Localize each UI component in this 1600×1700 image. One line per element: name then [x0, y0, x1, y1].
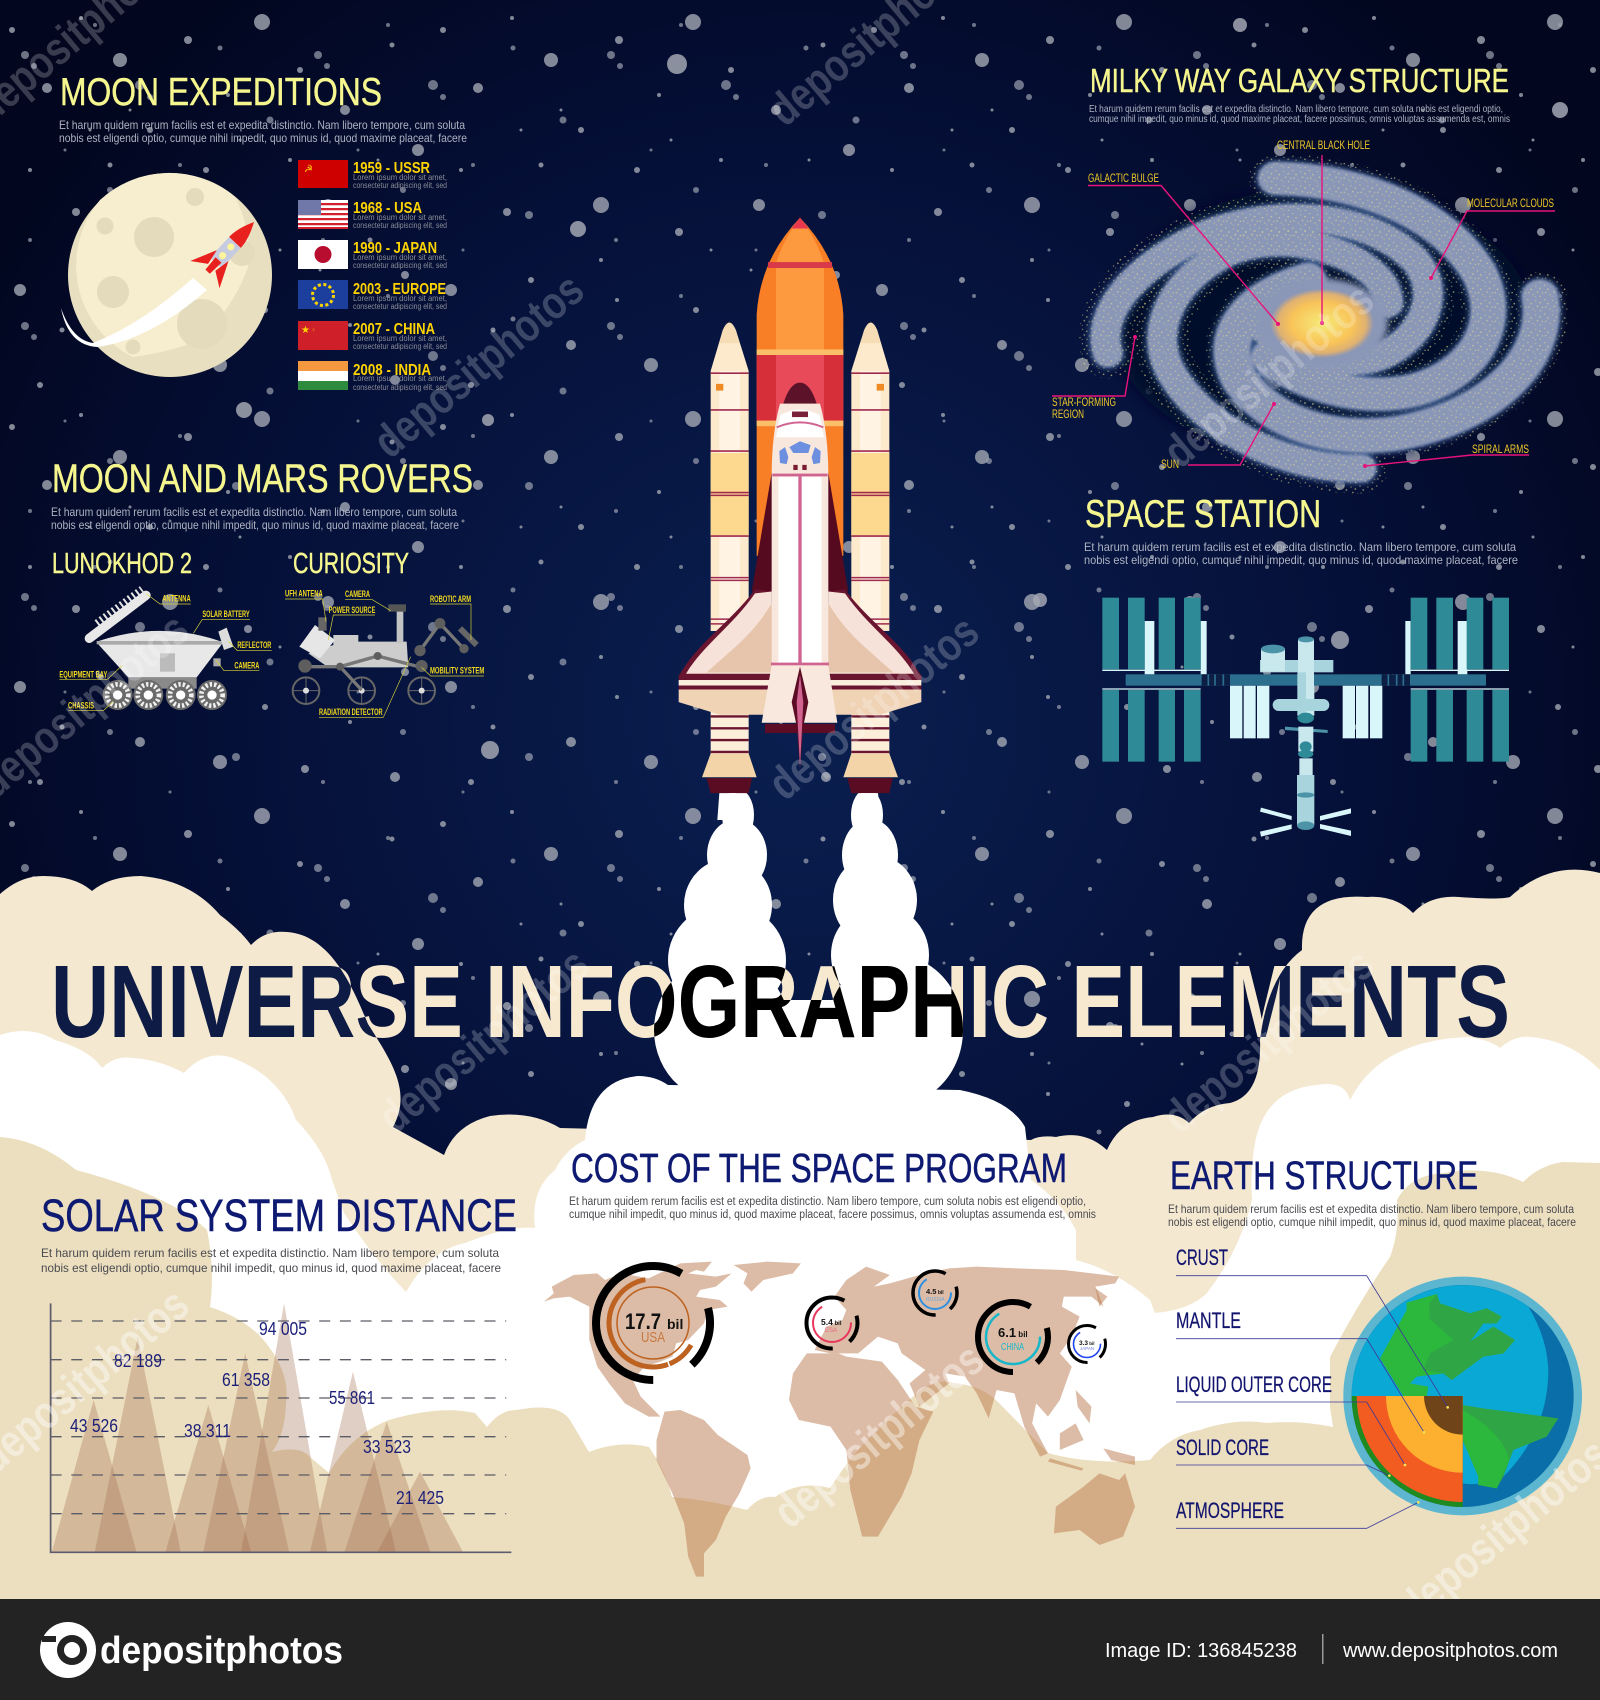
booster nozzles: [702, 710, 898, 820]
subheading: curiosity: CURIOSITY: [293, 548, 409, 580]
flag row: 1959 USSR: ☭: [304, 164, 313, 175]
clouds: cream back layer: [0, 870, 1600, 1313]
labels: earth layers: [1176, 1245, 1332, 1523]
flag row: 1959 USSR: consectetur adipiscing elit, sed: [353, 181, 447, 190]
labels: galaxy parts: GALACTIC BULGE: [1088, 171, 1159, 185]
flag row: 2008 India: 2008 - INDIA: [353, 362, 431, 379]
solid rocket booster: left: [711, 323, 749, 631]
diagram: curiosity rover: MOBILITY SYSTEM: [430, 665, 484, 675]
flag row: 2008 India: [298, 361, 447, 392]
background: starry night sky: [0, 0, 1600, 1250]
labels: galaxy parts: MOLECULAR CLOUDS: [1467, 196, 1554, 210]
marker: usa 17.7 bil: 17.7: [625, 1309, 661, 1334]
flag row: 1990 Japan: Lorem ipsum dolor sit amet,: [353, 253, 447, 262]
panel: space station: [1084, 493, 1518, 837]
chart: distance triangles: [51, 1303, 511, 1552]
flag row: 2007 China: [298, 321, 447, 351]
labels: galaxy parts: SUN: [1161, 457, 1179, 471]
marker: russia 4.5 bil: 4.5 bil: [926, 1287, 944, 1296]
flag row: 1968 USA: [298, 200, 447, 230]
flag row: 1968 USA: Lorem ipsum dolor sit amet,: [353, 213, 447, 222]
labels: galaxy parts: REGION: [1052, 407, 1084, 421]
text block: solar system intro: nobis est eligendi optio, cumque nihil impedit, quo minus id, quod maxime placeat, facere: [41, 1261, 501, 1275]
watermarks: depositphotos: [763, 1333, 993, 1538]
labels: galaxy parts: STAR-FORMING: [1052, 395, 1116, 409]
panel: moon and mars rovers: [51, 457, 484, 717]
text block: cost intro: Et harum quidem rerum facilis est et expedita distinctio. Nam libero tempore, cum soluta nobis est eligendi optio,: [569, 1196, 1086, 1208]
text block: station intro: [1084, 540, 1518, 567]
flag row: 1990 Japan: 1990 - JAPAN: [353, 240, 437, 257]
orbiter wings: [679, 473, 921, 715]
labels: galaxy parts: CENTRAL BLACK HOLE: [1277, 138, 1370, 152]
chart labels: distances: 21 425: [396, 1488, 444, 1508]
chart: spiral galaxy: [1106, 178, 1541, 468]
diagram: curiosity rover: ROBOTIC ARM: [430, 594, 471, 604]
flag row: 1990 Japan: consectetur adipiscing elit, sed: [353, 261, 447, 270]
clouds: darker cream front layer: [0, 1137, 1600, 1600]
clouds: white smoke layer and rocket exhaust: [0, 793, 1600, 1510]
heading: cost of the space program: COST OF THE SPACE PROGRAM: [571, 1145, 1067, 1191]
marker: esa 5.4 bil: ESA: [825, 1328, 837, 1334]
footer url: www.depositphotos.com: [1342, 1640, 1558, 1662]
text block: rovers intro: Et harum quidem rerum facilis est et expedita distinctio. Nam libero tempore, cum soluta: [51, 505, 457, 519]
chart labels: distances: 38 311: [184, 1421, 231, 1441]
marker: esa 5.4 bil: 5.4 bil: [821, 1317, 842, 1327]
flag row: 2003 Europe: consectetur adipiscing elit, sed: [353, 302, 447, 311]
labels: earth layers: LIQUID OUTER CORE: [1176, 1372, 1332, 1397]
diagram: earth cross-section: [1176, 1276, 1582, 1528]
panel: cost of the space program: [544, 1145, 1135, 1577]
diagram: lunokhod 2 rover: CHASSIS: [68, 700, 94, 710]
diagram: lunokhod 2 rover: EQUIPMENT BAY: [59, 670, 107, 680]
flag row: 1959 USSR: [298, 160, 447, 190]
flag row: 1990 Japan: [298, 240, 447, 270]
marker: usa 17.7 bil: bil: [667, 1316, 683, 1332]
chart labels: distances: 61 358: [222, 1370, 270, 1390]
text block: moon expeditions intro: nobis est eligendi optio, cumque nihil impedit, quo minus id, quod maxime placeat, facere: [59, 131, 467, 145]
flag row: 2003 Europe: [298, 280, 447, 311]
watermarks: depositphotos: [1153, 273, 1383, 478]
panel: solar system distance: [41, 1190, 517, 1552]
diagram: curiosity rover: CAMERA: [345, 589, 370, 599]
flag row: 2007 China: consectetur adipiscing elit, sed: [353, 342, 447, 351]
diagram: lunokhod 2 rover: REFLECTOR: [237, 640, 272, 650]
diagram: curiosity rover: UFH ANTENA: [285, 588, 323, 598]
heading: solar system distance: SOLAR SYSTEM DISTANCE: [41, 1190, 517, 1241]
marker: russia 4.5 bil: [908, 1266, 962, 1320]
flag row: 2003 Europe: Lorem ipsum dolor sit amet,: [353, 294, 447, 303]
heading: earth structure: EARTH STRUCTURE: [1170, 1154, 1478, 1198]
marker: esa 5.4 bil: [801, 1292, 863, 1354]
illustration: international space station: [1102, 598, 1509, 837]
watermarks: depositphotos: [758, 605, 988, 810]
diagram: lunokhod 2 rover: [59, 590, 272, 711]
chart labels: distances: 94 005: [259, 1319, 307, 1339]
panel: moon expeditions: [59, 71, 467, 392]
flag row: 2007 China: ⁘: [311, 328, 316, 334]
footer image id: Image ID: 136845238: [1105, 1640, 1297, 1662]
marker: russia 4.5 bil: RUSSIA: [926, 1297, 945, 1303]
flag row: 2008 India: Lorem ipsum dolor sit amet,: [353, 374, 447, 383]
callouts: galaxy leader lines: [1052, 155, 1555, 468]
text block: station intro: nobis est eligendi optio, cumque nihil impedit, quo minus id, quod maxime placeat, facere: [1084, 553, 1518, 567]
text block: galaxy intro: [1089, 103, 1510, 125]
flag row: 1959 USSR: Lorem ipsum dolor sit amet,: [353, 173, 447, 182]
labels: earth layers: ATMOSPHERE: [1176, 1498, 1284, 1523]
flag row: 1959 USSR: 1959 - USSR: [353, 160, 430, 177]
diagram: curiosity rover: RADIATION DETECTOR: [319, 707, 383, 717]
subheading: lunokhod 2: LUNOKHOD 2: [52, 548, 192, 580]
panel: earth structure: [1168, 1154, 1582, 1528]
chart labels: distances: 55 861: [329, 1388, 375, 1408]
diagram: curiosity rover: [285, 588, 484, 717]
main title: [56, 965, 1507, 1038]
diagram: lunokhod 2 rover: ANTENNA: [162, 593, 191, 603]
labels: earth layers: SOLID CORE: [1176, 1435, 1269, 1460]
chart labels: distances: 43 526: [70, 1416, 118, 1436]
heading: moon and mars rovers: MOON AND MARS ROVERS: [52, 457, 473, 501]
labels: earth layers: CRUST: [1176, 1245, 1228, 1270]
flag row: 2007 China: 2007 - CHINA: [353, 321, 435, 338]
flag row: 1968 USA: 1968 - USA: [353, 200, 422, 217]
world map: [544, 1262, 1135, 1577]
text block: station intro: Et harum quidem rerum facilis est et expedita distinctio. Nam libero tempore, cum soluta: [1084, 540, 1516, 554]
watermarks: depositphotos: [1153, 938, 1383, 1143]
panel: milky way galaxy structure: [1052, 62, 1555, 471]
flag row: 1968 USA: consectetur adipiscing elit, sed: [353, 221, 447, 230]
marker: china 6.1 bil: [970, 1294, 1056, 1380]
flag row: 2008 India: consectetur adipiscing elit, sed: [353, 383, 447, 392]
diagram: lunokhod 2 rover: SOLAR BATTERY: [202, 609, 250, 619]
text block: galaxy intro: Et harum quidem rerum facilis est et expedita distinctio. Nam libero tempore, cum soluta nobis est eligendi optio,: [1089, 103, 1503, 115]
flag row: 2007 China: Lorem ipsum dolor sit amet,: [353, 334, 447, 343]
labels: earth layers: MANTLE: [1176, 1308, 1241, 1333]
icon: moon with rocket: [61, 173, 272, 377]
text block: cost intro: cumque nihil impedit, quo minus id, quod maxime placeat, facere possimus, omnis voluptas assumenda est, omnis: [569, 1209, 1096, 1221]
text block: moon expeditions intro: Et harum quidem rerum facilis est et expedita distinctio. Nam libero tempore, cum soluta: [59, 118, 465, 132]
marker: china 6.1 bil: CHINA: [1001, 1342, 1024, 1353]
flag row: 2007 China: ★: [301, 325, 310, 336]
external fuel tank: [757, 218, 843, 556]
heading: space station: SPACE STATION: [1085, 493, 1321, 536]
text block: cost intro: [569, 1196, 1096, 1221]
flag row: 2003 Europe: 2003 - EUROPE: [353, 281, 446, 298]
illustration: space shuttle: [679, 218, 921, 820]
orbiter fuselage: [762, 383, 837, 767]
chart labels: distances: 82 189: [114, 1351, 162, 1371]
text block: moon expeditions intro: [59, 118, 467, 145]
marker: usa 17.7 bil: USA: [641, 1329, 665, 1346]
marker: usa 17.7 bil: [583, 1253, 723, 1393]
text block: earth intro: [1168, 1202, 1576, 1229]
icon: depositphotos logo: [40, 1622, 96, 1678]
footer logo text: depositphotos: [100, 1630, 343, 1672]
heading: moon expeditions: MOON EXPEDITIONS: [60, 71, 382, 114]
watermarks: depositphotos: [363, 263, 593, 468]
labels: galaxy parts: [1052, 138, 1554, 471]
diagram: lunokhod 2 rover: CAMERA: [234, 660, 260, 670]
chart labels: distances: [70, 1319, 444, 1508]
marker: japan 3.3 bil: JAPAN: [1080, 1346, 1094, 1351]
diagram: curiosity rover: POWER SOURCE: [329, 605, 375, 615]
text block: solar system intro: [41, 1246, 501, 1275]
watermarks: depositphotos: [368, 938, 598, 1143]
labels: galaxy parts: SPIRAL ARMS: [1472, 442, 1529, 456]
chart labels: distances: 33 523: [363, 1437, 411, 1457]
footer bar: [0, 1599, 1600, 1700]
solid rocket booster: right: [851, 323, 889, 631]
marker: china 6.1 bil: 6.1 bil: [998, 1325, 1028, 1340]
text block: rovers intro: [51, 505, 459, 532]
text block: solar system intro: Et harum quidem rerum facilis est et expedita distinctio. Nam libero tempore, cum soluta: [41, 1246, 499, 1260]
text block: rovers intro: nobis est eligendi optio, cumque nihil impedit, quo minus id, quod maxime placeat, facere: [51, 518, 459, 532]
marker: japan 3.3 bil: [1064, 1321, 1110, 1367]
marker: japan 3.3 bil: 3.3 bil: [1079, 1340, 1095, 1347]
